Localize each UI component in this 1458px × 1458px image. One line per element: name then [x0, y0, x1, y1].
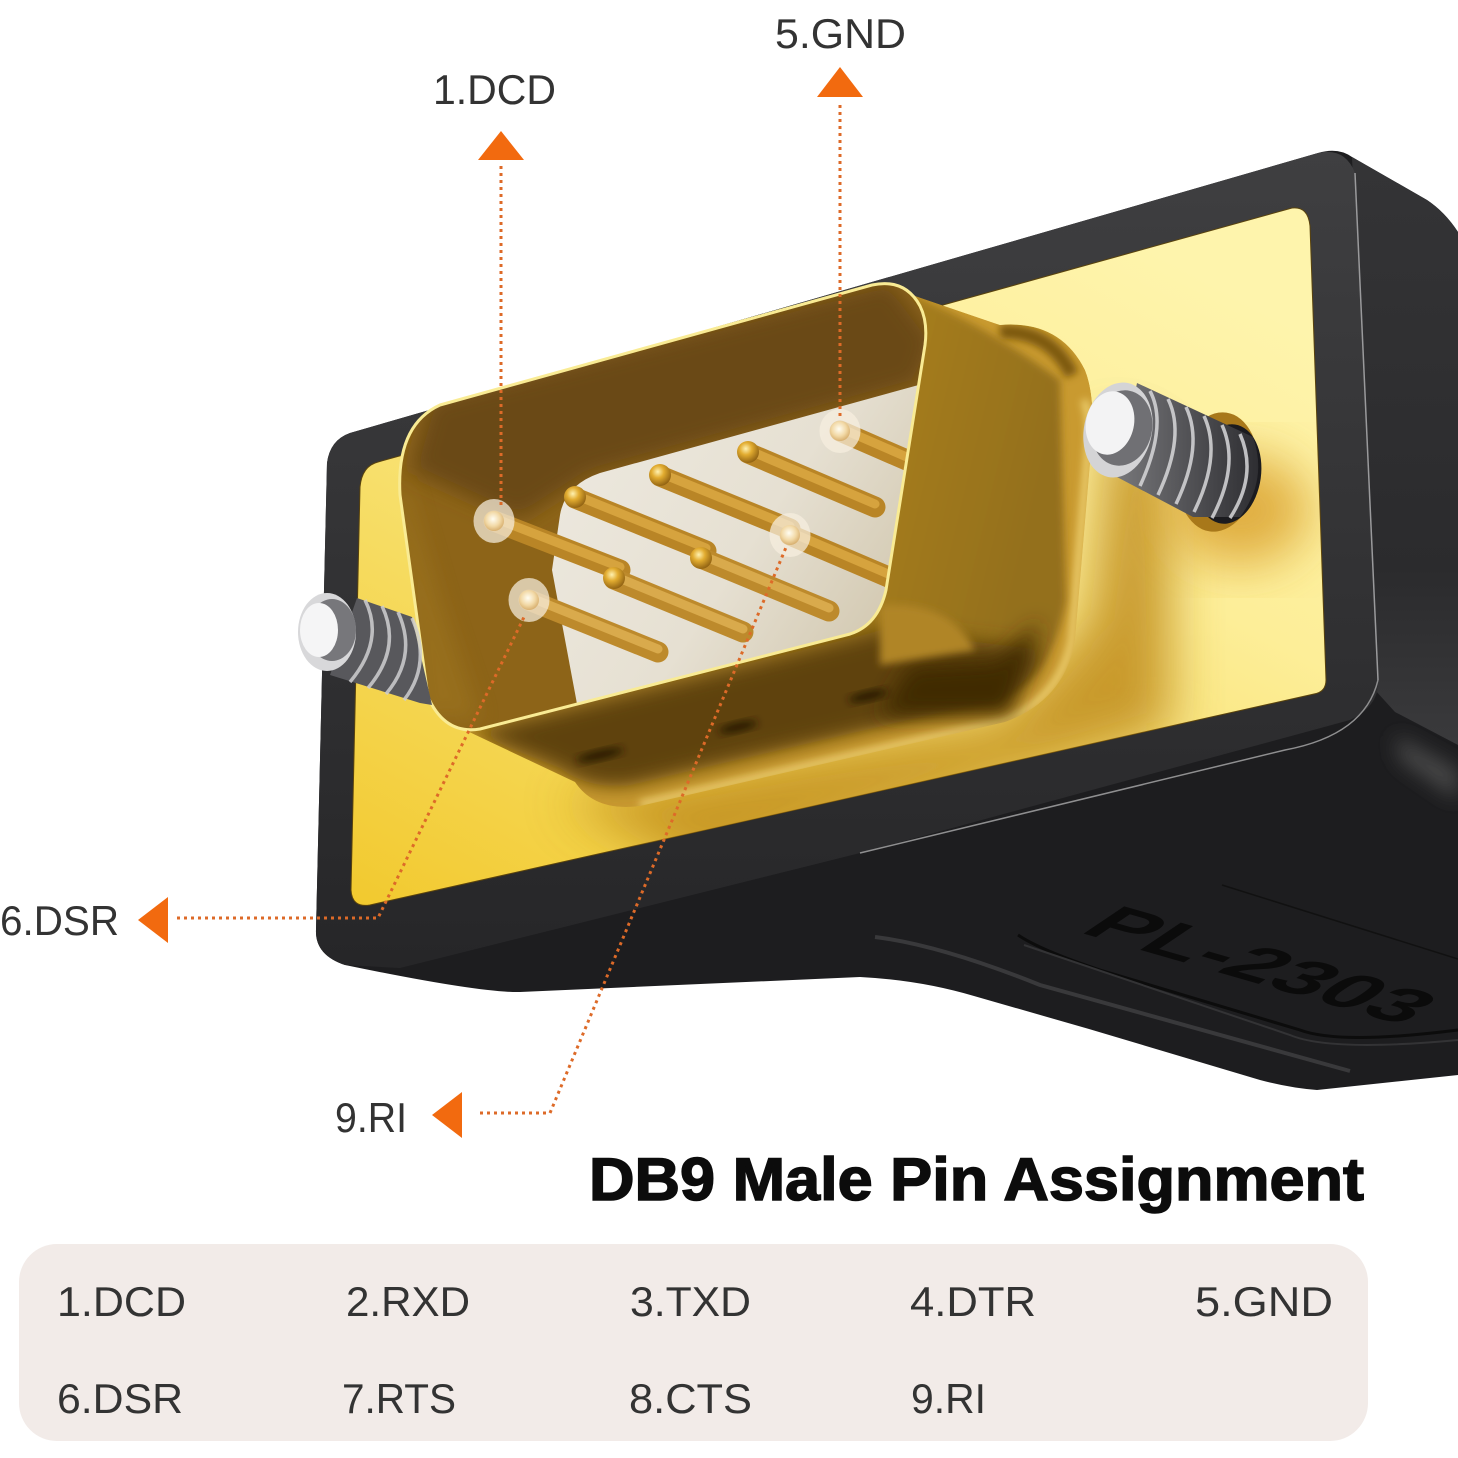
left screw: [298, 593, 432, 705]
base ridge: [875, 937, 1350, 1071]
housing silhouette: [316, 151, 1458, 1090]
lower edge highlight: [860, 680, 1378, 853]
title: DB9 Male Pin Assignment: [589, 1146, 1364, 1213]
connector interior: [390, 280, 935, 740]
soft side highlight: [1395, 735, 1458, 800]
housing front face: [316, 152, 1378, 968]
pins lower row: [529, 558, 829, 652]
callout: 1.DCD: 1.DCD: [433, 66, 556, 113]
gold plate: [351, 208, 1326, 905]
shell slots: [575, 745, 625, 765]
callout: 6.DSR: [0, 615, 525, 944]
highlighted pin halos: [474, 409, 860, 622]
pin tips: [564, 486, 586, 508]
embossed PL-2303 label: PL-2303: [1066, 896, 1457, 1034]
pins upper row: [494, 428, 925, 652]
side edge highlight: [1355, 173, 1378, 680]
panel: pin list: 8.CTS: [629, 1375, 752, 1422]
shell rim: [400, 284, 926, 730]
housing side face: [1352, 157, 1458, 745]
connector flange: [470, 296, 1092, 807]
callout: 5.GND: [775, 10, 906, 420]
panel: pin list: [19, 1244, 1368, 1441]
panel: pin list: 9.RI: [911, 1375, 986, 1422]
panel: pin list: 3.TXD: [630, 1278, 751, 1325]
callout: 9.RI: [335, 545, 787, 1141]
callout: 1.DCD: [433, 66, 556, 505]
panel: pin list: 7.RTS: [342, 1375, 456, 1422]
panel: pin list: 4.DTR: [910, 1278, 1036, 1325]
white insulator: [552, 384, 922, 720]
connector illustration: [298, 151, 1458, 1090]
panel: pin list: 2.RXD: [346, 1278, 470, 1325]
right screw: [1075, 376, 1268, 537]
panel: pin list: 5.GND: [1195, 1278, 1333, 1325]
connector shell walls: [465, 284, 1066, 783]
callout: 9.RI: 9.RI: [335, 1094, 407, 1141]
panel: pin list: 6.DSR: [57, 1375, 183, 1422]
callout: 5.GND: 5.GND: [775, 10, 906, 57]
interior upper wall: [410, 280, 935, 520]
panel: pin list: 1.DCD: [57, 1278, 186, 1325]
shell shadow: [470, 625, 1040, 786]
callout: 6.DSR: 6.DSR: [0, 897, 119, 944]
